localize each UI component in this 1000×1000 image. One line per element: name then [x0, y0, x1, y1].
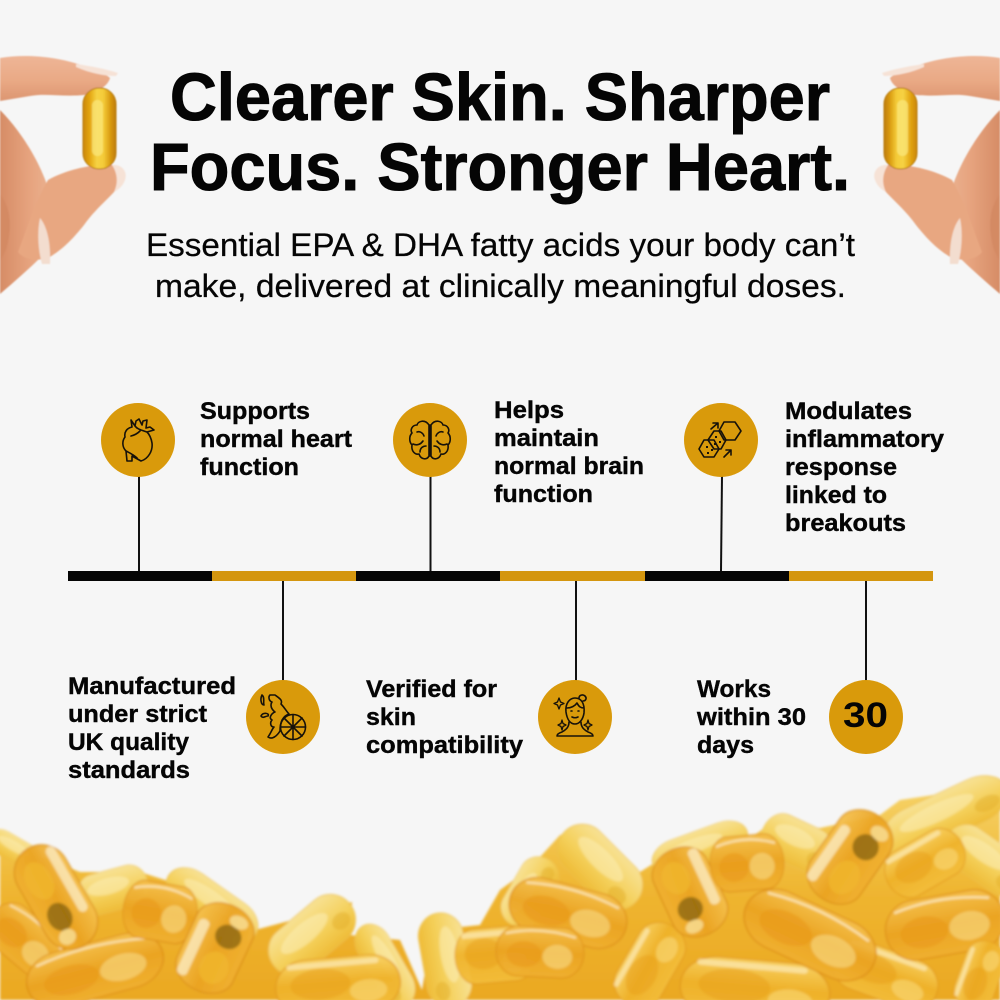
- icon: woman face with sparkles: [538, 680, 612, 754]
- timeline bar: [68, 571, 933, 581]
- left hand holding capsule: [0, 56, 126, 294]
- label: brain function: [494, 397, 644, 508]
- label: skin compatibility: skin: [366, 704, 416, 731]
- connector lines: [139, 476, 866, 681]
- label: UK quality: standards: [68, 757, 190, 784]
- item: UK quality: [68, 673, 320, 784]
- label: skin compatibility: compatibility: [366, 732, 524, 759]
- label: inflammatory response: inflammatory: [785, 426, 945, 453]
- label: brain function: Helps: [494, 397, 564, 424]
- item: heart function: [101, 398, 352, 481]
- label: heart function: normal heart: [200, 426, 352, 453]
- label: UK quality: [68, 673, 236, 784]
- label: brain function: maintain: [494, 425, 599, 452]
- label: works within 30 days: [696, 676, 806, 759]
- badge: 30: [829, 680, 903, 754]
- label: inflammatory response: breakouts: [785, 510, 906, 537]
- subtitle: Essential EPA & DHA fatty acids your body can’t: [146, 227, 855, 263]
- label: brain function: normal brain: [494, 453, 644, 480]
- item: brain function: [393, 397, 644, 508]
- label: inflammatory response: Modulates: [785, 398, 912, 425]
- label: UK quality: UK quality: [68, 729, 190, 756]
- badge: 30: 30: [843, 696, 888, 735]
- label: works within 30 days: within 30: [696, 704, 806, 731]
- icon: brain: [393, 403, 467, 477]
- capsule pile: [0, 766, 1000, 1000]
- icon: hexagons with arrows: [684, 403, 758, 477]
- title: Clearer Skin. Sharper: [170, 60, 830, 135]
- title: [150, 60, 850, 205]
- subtitle: make, delivered at clinically meaningful doses.: [155, 268, 846, 304]
- item: skin compatibility: [366, 676, 612, 759]
- label: works within 30 days: Works: [697, 676, 771, 703]
- label: heart function: [200, 398, 352, 481]
- icon: heart: [101, 403, 175, 477]
- label: works within 30 days: days: [697, 732, 754, 759]
- foreground amber capsules: [0, 799, 1000, 1000]
- label: UK quality: Manufactured: [68, 673, 236, 700]
- label: heart function: function: [200, 454, 299, 481]
- right hand holding capsule: [874, 56, 1000, 294]
- item: inflammatory response: [684, 398, 945, 537]
- label: inflammatory response: linked to: [785, 482, 887, 509]
- subtitle: [146, 227, 855, 304]
- label: skin compatibility: [366, 676, 524, 759]
- label: UK quality: under strict: [68, 701, 207, 728]
- background pale capsules: [0, 766, 1000, 1000]
- label: brain function: function: [494, 481, 593, 508]
- title: Focus. Stronger Heart.: [150, 130, 850, 205]
- label: inflammatory response: response: [785, 454, 897, 481]
- label: skin compatibility: Verified for: [366, 676, 497, 703]
- item: works within 30 days: [696, 676, 903, 759]
- label: inflammatory response: [785, 398, 945, 537]
- icon: UK map and flag: [246, 680, 320, 754]
- label: heart function: Supports: [200, 398, 310, 425]
